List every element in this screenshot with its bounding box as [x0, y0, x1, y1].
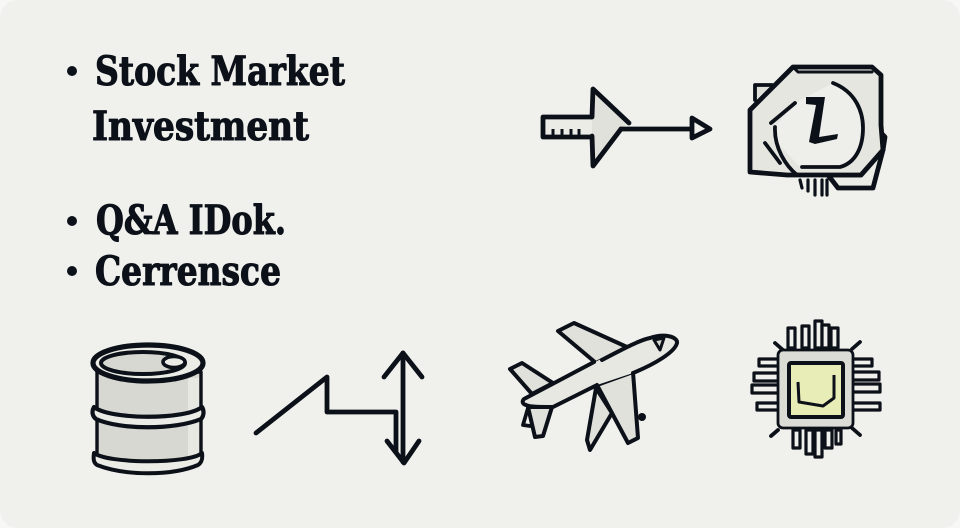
fuselage: [523, 336, 677, 407]
lower tail: [528, 407, 552, 437]
icon: oil barrel: [93, 345, 204, 473]
barrel body: [97, 372, 201, 462]
bullet list: [67, 48, 345, 295]
icon: microchip: [752, 321, 880, 457]
left pins: [752, 359, 779, 410]
bottom pins: [793, 430, 841, 457]
top lid: [93, 345, 203, 381]
icon: clock document: [750, 67, 885, 195]
icon: airplane: [510, 323, 677, 450]
right fold: [828, 123, 885, 188]
bullet item: Cerrensce: Cerrensce: [95, 248, 281, 295]
chip core: [789, 363, 843, 417]
icon: ruler arrow pointing right: [543, 89, 710, 166]
back tab: [755, 85, 772, 100]
bottom ticks: [800, 180, 827, 195]
bullet item: Stock Market Investment: Stock Market: [95, 48, 345, 95]
core mark: [798, 375, 834, 406]
cockpit window: [654, 338, 664, 350]
tail fin: [510, 363, 553, 394]
clock face: [775, 83, 863, 167]
main octagon: [750, 67, 883, 175]
upper wing: [558, 323, 627, 363]
icon: zigzag line with up and down arrow: [256, 353, 422, 463]
bottom rim: [94, 453, 202, 473]
diagonal pins: [771, 342, 860, 436]
right pins: [852, 359, 880, 410]
near lower wing: [597, 372, 638, 443]
bullet item: Stock Market Investment: Investment: [92, 103, 309, 150]
bullet item: Stock Market Investment: [67, 48, 345, 150]
top pins: [788, 321, 838, 348]
bullet item: Q&A Dok.: Q&A IDok.: [96, 197, 286, 244]
middle rib: [93, 407, 204, 427]
chip body: [778, 350, 853, 428]
far lower wing: [587, 388, 612, 450]
clock hand digit: [806, 97, 838, 144]
